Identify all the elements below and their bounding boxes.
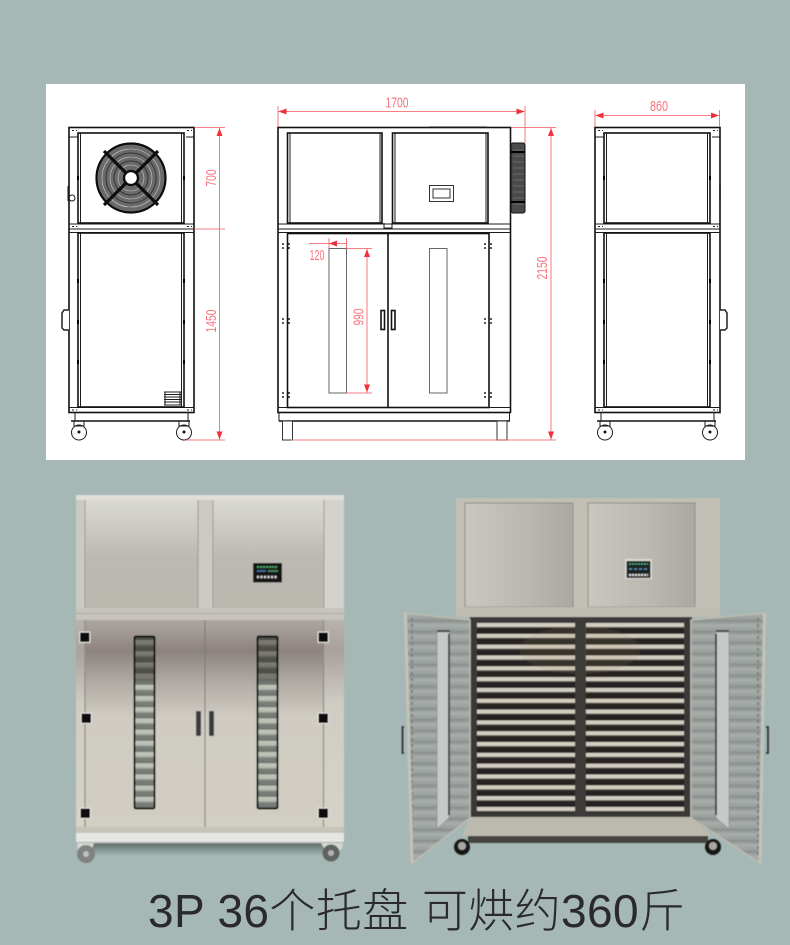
dimension: 990 window height	[346, 248, 372, 393]
upper cabinet	[456, 498, 720, 617]
base rail	[76, 827, 344, 844]
control panel	[253, 563, 282, 582]
control screen outline	[430, 186, 454, 202]
label: 700: 700	[203, 170, 220, 186]
dimension: 1700 width: 1700	[386, 94, 408, 112]
right open door	[691, 613, 765, 863]
door window right	[430, 248, 447, 393]
dimension: 860 depth	[595, 98, 720, 127]
icon: side handle right	[720, 310, 727, 330]
double doors outline	[288, 233, 489, 408]
photo: open dryer with trays	[402, 498, 768, 863]
chamber interior	[470, 617, 692, 817]
door handles	[402, 727, 768, 753]
upper right panel	[392, 133, 488, 223]
caption: 3P 36个托盘 可烘约360斤	[148, 885, 685, 937]
window right	[257, 636, 278, 809]
middle rail	[76, 608, 344, 620]
control panel	[625, 559, 652, 579]
base and feet	[279, 412, 510, 440]
icon: vent grille	[164, 392, 181, 405]
drawing: left side view with fan	[62, 128, 194, 440]
door window left	[329, 248, 346, 393]
drawing: front view	[278, 127, 525, 440]
dimension: 990 window height: 990	[350, 308, 368, 326]
dimension: 1700 width	[278, 94, 525, 143]
casters and base shadow	[454, 836, 721, 855]
dimension: 120 window width: 120	[310, 247, 324, 264]
base platform	[462, 817, 712, 836]
upper cabinet	[76, 495, 344, 609]
panel: technical drawings	[46, 84, 745, 460]
label: 1450: 1450	[203, 310, 220, 332]
handles	[196, 711, 214, 736]
window left	[134, 636, 155, 809]
icon: condenser fan	[96, 144, 166, 212]
dimension: 700 and 1450 heights	[186, 128, 225, 440]
dimension: 860 depth: 860	[650, 98, 668, 115]
center post	[575, 617, 585, 817]
hinges dots	[283, 243, 491, 398]
casters	[77, 843, 343, 863]
tray rack left	[477, 623, 575, 813]
drawing: right side view	[595, 128, 727, 440]
dimension: 2150 height	[291, 128, 556, 440]
left open door	[405, 613, 470, 863]
icon: side handle	[62, 310, 69, 330]
dimension: 120 window width	[309, 238, 346, 264]
floor shadow	[92, 842, 324, 856]
photo: closed dryer front	[76, 495, 344, 863]
door handles	[381, 310, 395, 330]
tray rack right	[586, 623, 684, 813]
hinges	[80, 632, 328, 818]
upper left panel	[288, 133, 382, 223]
icon: side fan profile	[511, 143, 525, 213]
lower doors	[76, 620, 344, 827]
interior warm reflection	[520, 626, 640, 674]
icon: side lock	[68, 186, 75, 201]
dimension: 2150 height: 2150	[534, 256, 551, 280]
